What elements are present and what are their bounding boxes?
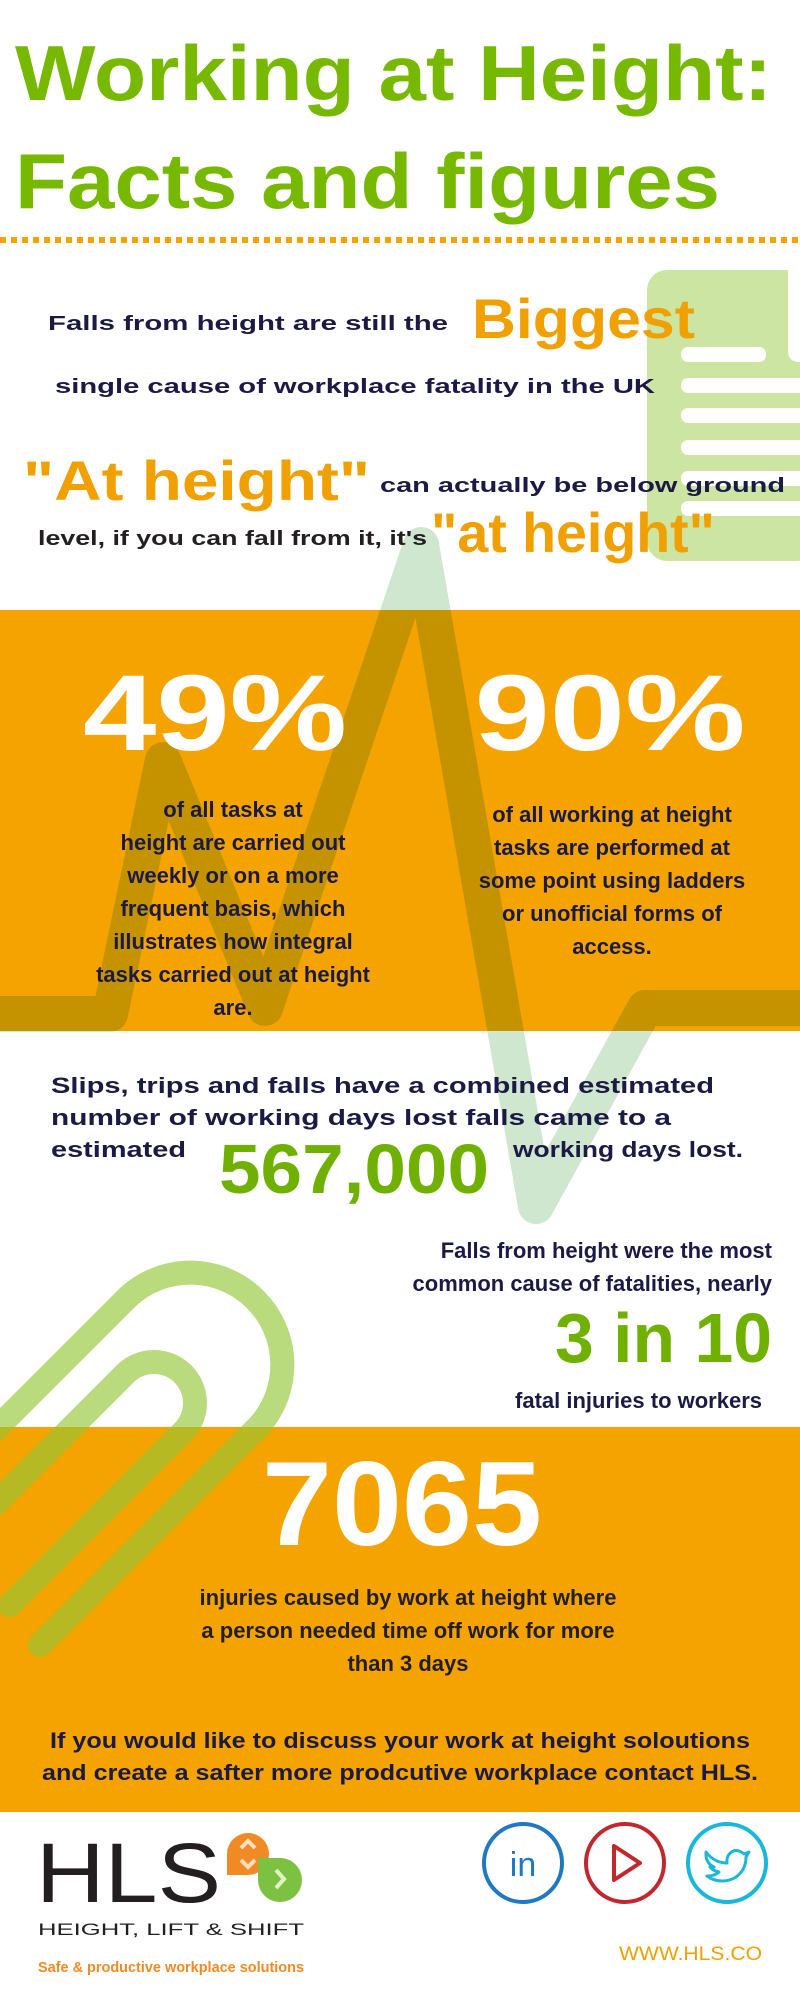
stat: 90%: some point using ladders xyxy=(479,868,745,893)
icon: twitter xyxy=(688,1824,766,1902)
text block: at height definition: level, if you can fall from it, it's xyxy=(38,528,427,550)
stat: 3 in 10: common cause of fatalities, nearly xyxy=(413,1271,773,1296)
stat: 3 in 10 xyxy=(413,1238,773,1413)
text block: at height definition: can actually be below ground xyxy=(380,475,785,497)
text block: biggest cause: Biggest xyxy=(472,287,695,350)
stat: 49%: of all tasks at xyxy=(163,797,303,822)
text block: biggest cause: single cause of workplace fatality in the UK xyxy=(55,376,656,398)
icon: paper clip xyxy=(0,1273,282,1645)
logo: HLS: Safe & productive workplace solutions xyxy=(38,1959,304,1976)
stat: 49%: illustrates how integral xyxy=(113,929,353,954)
stat: 567,000 days lost: working days lost. xyxy=(512,1137,743,1162)
stat: 49%: frequent basis, which xyxy=(121,896,345,921)
stat: 567,000 days lost xyxy=(51,1073,743,1208)
stat: 49%: height are carried out xyxy=(121,830,346,855)
call to action xyxy=(42,1728,758,1785)
stat: 90%: access. xyxy=(572,934,652,959)
divider dotted xyxy=(0,237,800,243)
stat: 3 in 10: 3 in 10 xyxy=(555,1299,772,1377)
icon: document xyxy=(647,262,800,561)
stat: 90%: of all working at height xyxy=(492,802,732,827)
call to action: and create a safter more prodcutive workplace contact HLS. xyxy=(42,1760,758,1785)
logo: HLS xyxy=(36,1826,304,1976)
stat: 567,000 days lost: estimated xyxy=(51,1137,186,1162)
stat: 7065 injuries xyxy=(200,1437,616,1676)
stat: 567,000 days lost: 567,000 xyxy=(219,1130,489,1208)
icon: youtube xyxy=(586,1824,664,1902)
text block: at height definition: "At height" xyxy=(23,449,370,512)
orange band 2 xyxy=(0,1427,800,1812)
stat: 49% xyxy=(83,652,371,1020)
website url: WWW.HLS.CO xyxy=(619,1944,762,1965)
stat: 90%: 90% xyxy=(474,652,746,773)
call to action: If you would like to discuss your work at height soloutions xyxy=(50,1728,750,1753)
title: Facts and figures xyxy=(15,137,720,225)
stat: 3 in 10: Falls from height were the most xyxy=(441,1238,773,1263)
text block: biggest cause xyxy=(48,287,695,398)
stat: 49%: weekly or on a more xyxy=(126,863,339,888)
stat: 49%: 49% xyxy=(83,652,347,773)
icon: linkedin: in xyxy=(510,1846,536,1884)
stat: 90%: tasks are performed at xyxy=(494,835,731,860)
stat: 3 in 10: fatal injuries to workers xyxy=(515,1388,762,1413)
stat: 567,000 days lost: number of working days lost falls came to a xyxy=(51,1105,672,1130)
stat: 7065 injuries: than 3 days xyxy=(347,1651,469,1676)
text block: at height definition xyxy=(23,449,785,564)
stat: 90%: or unofficial forms of xyxy=(502,901,723,926)
decorative zigzag line xyxy=(0,545,800,1206)
title xyxy=(15,29,772,225)
stat: 7065 injuries: 7065 xyxy=(262,1437,542,1571)
logo: HLS: HLS xyxy=(36,1826,221,1920)
stat: 90% xyxy=(474,652,746,959)
text block: at height definition: "at height" xyxy=(431,501,715,564)
stat: 49%: are. xyxy=(213,995,253,1020)
stat: 7065 injuries: a person needed time off work for more xyxy=(201,1618,615,1643)
text block: biggest cause: Falls from height are still the xyxy=(48,313,448,335)
logo: HLS: HEIGHT, LIFT & SHIFT xyxy=(38,1920,304,1939)
stat: 7065 injuries: injuries caused by work at height where xyxy=(200,1585,616,1610)
icon: linkedin xyxy=(484,1824,562,1902)
stat: 49%: tasks carried out at height xyxy=(96,962,371,987)
orange band 1 xyxy=(0,610,800,1031)
stat: 567,000 days lost: Slips, trips and falls have a combined estimated xyxy=(51,1073,714,1098)
title: Working at Height: xyxy=(15,29,772,117)
